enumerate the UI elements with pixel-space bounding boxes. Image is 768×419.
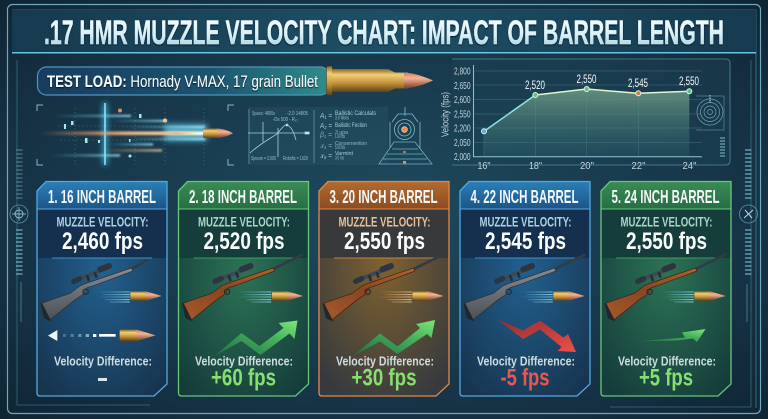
formula list: 𝑥₄ = bbox=[320, 143, 332, 150]
icon: flying bullet bbox=[203, 128, 233, 138]
card 5 velocity value: 2,550 fps bbox=[626, 228, 707, 255]
formula list bbox=[319, 111, 376, 162]
formula list: A₂ = bbox=[319, 123, 332, 130]
x axis labels: 20" bbox=[580, 160, 594, 172]
side ornament left bbox=[10, 150, 28, 322]
card 2 velocity value: 2,520 fps bbox=[204, 228, 284, 255]
ballistics formula panel: Robnfix = 1620 bbox=[283, 156, 308, 162]
card 3 rifle bbox=[323, 255, 443, 320]
x axis labels: 16" bbox=[478, 160, 491, 172]
formula list: 𝑥₈ = bbox=[320, 153, 332, 160]
formula list: Consernention bbox=[335, 141, 367, 147]
card 1 velocity panel bbox=[37, 209, 167, 258]
y axis labels bbox=[454, 66, 471, 163]
panel: card 1, 16 inch barrel bbox=[37, 182, 167, 396]
trajectory curve bbox=[248, 122, 310, 157]
panel: card 3, 20 inch barrel bbox=[319, 182, 449, 396]
card 2 velocity panel bbox=[178, 209, 308, 258]
formula list: A₁ = bbox=[319, 111, 333, 120]
value labels: 2,545 bbox=[628, 78, 648, 90]
formula list: Ballistic Calculats bbox=[335, 111, 376, 117]
card 3 heading: 3. 20 INCH BARREL bbox=[330, 186, 438, 207]
formula list: 1.60 fbs bbox=[335, 134, 345, 140]
formula list: β₁ = bbox=[319, 132, 332, 139]
formula list: 3.0 fl/ons bbox=[335, 116, 349, 122]
card 3 difference value: +30 fps bbox=[352, 365, 416, 392]
ballistics formula panel bbox=[248, 107, 388, 165]
card 4 velocity label: MUZZLE VELOCITY: bbox=[480, 214, 572, 230]
title bar bbox=[12, 10, 756, 54]
card 4 header bbox=[460, 182, 590, 209]
y axis title: Velocity (fps) bbox=[440, 92, 452, 137]
card 2 difference label: Velocity Difference: bbox=[195, 354, 293, 369]
card 1 heading: 1. 16 INCH BARREL bbox=[48, 186, 156, 207]
value labels bbox=[525, 74, 699, 92]
formula list: Varmint bbox=[335, 151, 353, 157]
side ornament right bbox=[740, 150, 758, 322]
card 1 header bbox=[37, 182, 167, 209]
card 1 velocity label: MUZZLE VELOCITY: bbox=[56, 214, 148, 230]
data points bbox=[482, 86, 692, 134]
card 1 left arrow with bullet bbox=[48, 330, 155, 341]
card 4 difference value: -5 fps bbox=[500, 365, 550, 392]
panel: card 4, 22 inch barrel bbox=[460, 182, 590, 396]
formula list: 3 upa bbox=[335, 130, 349, 136]
card 4 velocity panel bbox=[460, 209, 590, 258]
card 3 up arrow bbox=[353, 320, 435, 356]
y axis labels: 2,800 bbox=[454, 66, 471, 78]
card 1 difference value bbox=[98, 378, 107, 381]
panel: velocity line chart bbox=[440, 59, 730, 172]
card 2 difference value: +60 fps bbox=[211, 365, 276, 392]
value labels: 2,550 bbox=[576, 74, 596, 86]
test load banner bbox=[38, 66, 433, 96]
card 4 velocity value: 2,545 fps bbox=[485, 228, 566, 255]
panel: card 5, 24 inch barrel bbox=[601, 182, 731, 396]
card 2 header bbox=[178, 182, 308, 209]
formula list: 5.60 lbs bbox=[335, 145, 345, 151]
axes bbox=[474, 65, 702, 157]
y axis labels: 2,550 bbox=[454, 108, 471, 120]
icon: target range bbox=[379, 107, 432, 164]
card 5 rifle bbox=[605, 254, 725, 320]
card 1 difference label: Velocity Difference: bbox=[54, 354, 152, 369]
grid lines bbox=[473, 71, 702, 157]
ballistics formula panel: -Ds 500 - R₁₂ bbox=[273, 117, 298, 123]
card 4 rifle bbox=[464, 255, 584, 320]
card 5 difference label: Velocity Difference: bbox=[618, 354, 716, 369]
x axis labels: 22" bbox=[632, 160, 646, 172]
x axis labels bbox=[478, 160, 697, 172]
card 5 header bbox=[601, 182, 731, 209]
card 3 velocity label: MUZZLE VELOCITY: bbox=[338, 214, 430, 230]
bullet speed graphic bbox=[37, 103, 234, 165]
formula list: Ballistic Festion bbox=[335, 123, 367, 129]
card 2 rifle bbox=[183, 255, 303, 320]
ballistics formula panel: -2.0 14805 bbox=[287, 111, 308, 117]
card 4 difference label: Velocity Difference: bbox=[477, 354, 575, 369]
card 1 rifle bbox=[41, 260, 161, 320]
velocity line bbox=[484, 89, 689, 131]
area under line bbox=[484, 89, 689, 157]
icon: radar reticle bbox=[696, 95, 724, 130]
value labels: 2,520 bbox=[525, 80, 545, 92]
card 3 velocity panel bbox=[319, 209, 449, 258]
ballistics formula panel: Sjoesm = 3.005 bbox=[251, 156, 276, 162]
ballistics formula panel: Space: 4890s bbox=[252, 111, 275, 117]
speed streaks bbox=[40, 115, 210, 156]
x axis labels: 24" bbox=[682, 160, 697, 172]
value labels: 2,550 bbox=[679, 76, 699, 88]
card 4 down arrow bbox=[496, 319, 576, 352]
icon: cartridge bbox=[326, 66, 433, 96]
y axis labels: 2,050 bbox=[454, 137, 471, 149]
y axis labels: 2,600 bbox=[454, 94, 471, 106]
formula list: 3.0 ms bbox=[335, 156, 344, 162]
card 3 difference label: Velocity Difference: bbox=[336, 354, 434, 369]
card 2 velocity label: MUZZLE VELOCITY: bbox=[198, 214, 290, 230]
card 5 difference value: +5 fps bbox=[639, 365, 693, 392]
card 4 heading: 4. 22 INCH BARREL bbox=[470, 186, 578, 207]
card 3 velocity value: 2,550 fps bbox=[344, 228, 425, 255]
card 3 header bbox=[319, 182, 449, 209]
panel: card 2, 18 inch barrel bbox=[178, 182, 308, 396]
card 2 heading: 2. 18 INCH BARREL bbox=[189, 186, 297, 207]
x axis labels: 18" bbox=[529, 160, 542, 172]
card 2 up arrow bbox=[214, 320, 298, 356]
y axis labels: 2,000 bbox=[454, 151, 471, 163]
y axis labels: 2,200 bbox=[454, 122, 471, 134]
y axis labels: 2,650 bbox=[454, 80, 471, 92]
card 5 velocity panel bbox=[601, 209, 731, 258]
card 5 slight up arrow bbox=[637, 329, 706, 342]
card 1 velocity value: 2,460 fps bbox=[62, 228, 143, 255]
test load text: TEST LOAD: Hornady V-MAX, 17 grain Bullet bbox=[47, 73, 318, 91]
card 5 velocity label: MUZZLE VELOCITY: bbox=[620, 214, 712, 230]
